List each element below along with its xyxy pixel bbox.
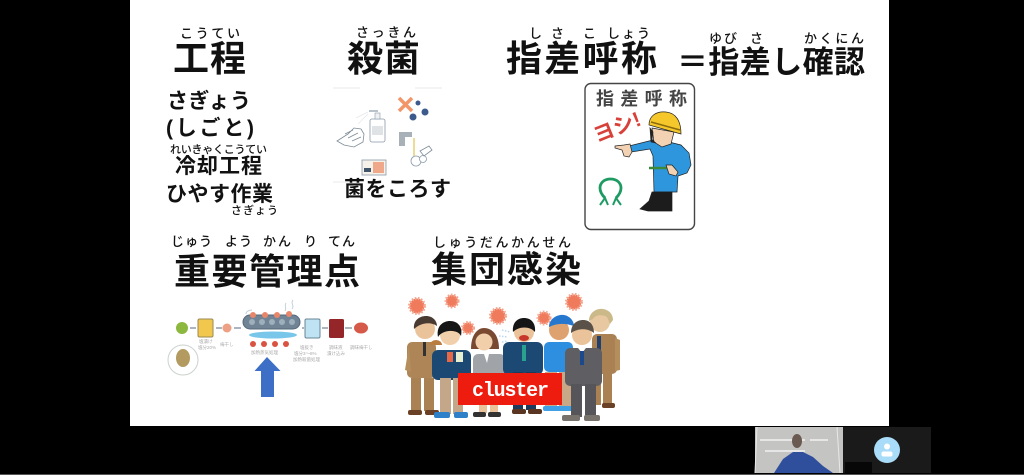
video tile: participant avatar <box>843 427 931 473</box>
sneeze droplets <box>499 330 510 342</box>
icon: faucet <box>399 132 412 146</box>
heading: ＝指差し確認: ＝指差し確認 <box>677 45 865 80</box>
text: ひやす作業: ひやす作業 <box>166 183 273 206</box>
viruses <box>410 294 582 334</box>
step captions: 塩漬け <box>199 338 213 345</box>
section: 集団感染 <box>405 235 620 421</box>
exclamation: ヨシ!: ヨシ! <box>590 108 644 148</box>
sign title: 指差呼称 <box>596 88 687 109</box>
video tile: presenter webcam <box>755 427 843 473</box>
heading: 集団感染: 集団感染 <box>431 249 581 290</box>
furigana: じゅう よう かん り てん: り <box>304 234 317 249</box>
step captions: 塩分3〜8% <box>294 350 317 357</box>
section: 工程 <box>166 26 278 217</box>
section: 重要管理点 <box>168 234 373 397</box>
illustration: hand sanitizing <box>333 88 442 182</box>
label: cluster: cluster <box>472 380 549 403</box>
person: man in blue cap <box>543 315 574 411</box>
logo: omega mark <box>600 179 621 205</box>
section: 指差呼称 <box>506 26 865 230</box>
furigana: し さ こ しょう: し <box>529 26 542 41</box>
icon: sanitizer bottle <box>356 111 385 142</box>
step: finished plum <box>354 322 368 334</box>
text: さぎょう(しごと): さぎょう <box>167 89 251 113</box>
sign: 指差呼称 card <box>585 84 694 230</box>
arrow: blue up arrow <box>254 357 280 397</box>
step: conveyor heat treatment <box>243 300 300 347</box>
furigana: じゅう よう かん り てん: てん <box>328 234 355 249</box>
furigana: し さ こ しょう <box>529 26 650 41</box>
furigana: ゆび さ <box>709 31 763 46</box>
slide panel <box>130 0 889 426</box>
step: green plum <box>176 322 188 334</box>
person: man in navy jacket <box>430 321 471 418</box>
label: cluster <box>458 373 562 405</box>
furigana: じゅう よう かん り てん: よう <box>225 234 252 249</box>
heading: 重要管理点: 重要管理点 <box>174 251 360 292</box>
step captions: 調味液 <box>329 344 343 351</box>
furigana: ゆび さ: ゆび <box>709 31 737 46</box>
callout: seed <box>168 345 198 375</box>
furigana: じゅう よう かん り てん: かん <box>263 234 291 249</box>
step captions: 加熱殺菌処理 <box>293 356 320 363</box>
furigana: さぎょう: さぎょう <box>231 203 278 217</box>
step captions: 塩抜き <box>300 344 314 351</box>
illustration: pointing worker <box>615 112 691 211</box>
person: woman in grey suit <box>471 328 505 417</box>
icon: germs <box>410 100 428 120</box>
icon: cross <box>399 98 412 111</box>
furigana: かくにん: かくにん <box>804 31 864 46</box>
person: man in grey suit <box>562 320 602 421</box>
furigana: し さ こ しょう: しょう <box>607 26 650 41</box>
furigana: し さ こ しょう: さ <box>551 26 564 41</box>
text: さぎょう(しごと): (しごと) <box>166 116 254 140</box>
illustration: crowd with viruses <box>405 294 620 421</box>
text: さぎょう(しごと) <box>166 89 254 140</box>
heading: 工程: 工程 <box>173 38 246 79</box>
diagram: pickled plum process <box>168 300 373 375</box>
step captions: 梅干し <box>220 341 234 348</box>
furigana: し さ こ しょう: こ <box>583 26 596 41</box>
text: 菌をころす: 菌をころす <box>344 178 451 201</box>
person: sneezing man in navy suit <box>503 318 543 414</box>
step: water jar <box>305 319 320 338</box>
icon: soap box <box>362 160 386 175</box>
step captions <box>198 338 373 363</box>
furigana: れいきゃくこうてい: れいきゃくこうてい <box>170 143 267 156</box>
furigana: さっきん: さっきん <box>356 25 416 40</box>
furigana: ゆび さ: さ <box>750 31 763 46</box>
step captions: 加熱蒸気処理 <box>251 349 278 356</box>
step captions: 塩分20% <box>198 344 216 351</box>
step: seasoning jar <box>329 319 344 338</box>
furigana: じゅう よう かん り てん <box>171 234 355 249</box>
person: man in tan suit <box>405 316 439 415</box>
section: 殺菌 <box>333 25 451 201</box>
furigana: こうてい: こうてい <box>180 26 240 41</box>
step: dried plum <box>222 324 232 332</box>
furigana: しゅうだんかんせん: しゅうだんかんせん <box>433 235 571 250</box>
heading: 指差呼称: 指差呼称 <box>506 38 657 79</box>
icon: water stream and foam <box>411 138 432 166</box>
step captions: 漬け込み <box>327 350 345 357</box>
step: salting jar <box>198 319 213 337</box>
heading: 殺菌: 殺菌 <box>347 38 420 79</box>
step captions: 調味梅干し <box>350 344 373 351</box>
furigana: じゅう よう かん り てん: じゅう <box>171 234 212 249</box>
icon: hands <box>337 128 364 147</box>
person: elderly man <box>589 309 620 408</box>
text: 冷却工程: 冷却工程 <box>175 155 262 178</box>
